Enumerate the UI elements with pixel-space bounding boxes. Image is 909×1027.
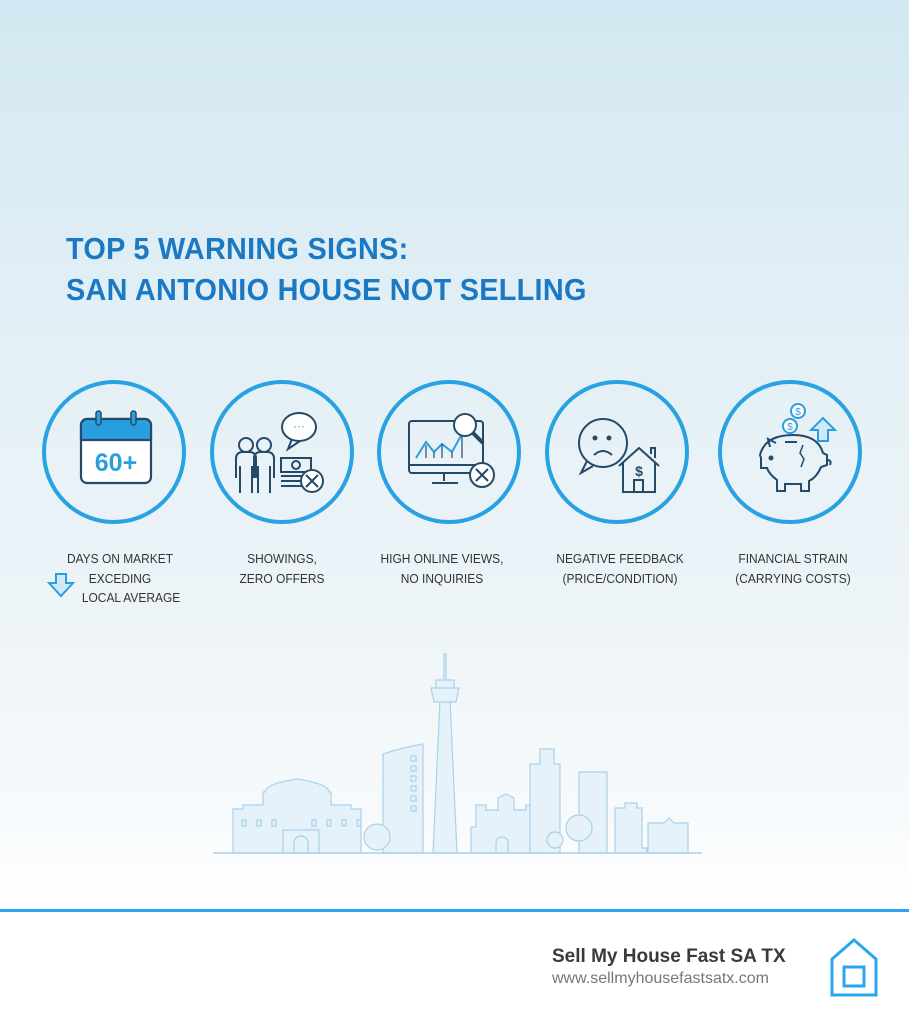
icon: calendar 60+ xyxy=(44,382,184,522)
title xyxy=(66,231,587,307)
label 2 xyxy=(239,551,325,586)
icon: sad bubble and house: $ xyxy=(635,463,643,479)
label 4: (PRICE/CONDITION) xyxy=(563,570,677,586)
footer brand text xyxy=(552,946,786,987)
icon: down arrow xyxy=(49,574,73,596)
label 1 xyxy=(67,551,180,605)
skyline xyxy=(213,653,702,854)
footer brand text: Sell My House Fast SA TX xyxy=(552,946,786,967)
footer xyxy=(0,909,909,1027)
icons row xyxy=(42,380,862,598)
icon: piggy bank with coins xyxy=(720,382,860,522)
label 1: DAYS ON MARKET xyxy=(67,551,173,566)
label 2: ZERO OFFERS xyxy=(239,570,325,586)
title: SAN ANTONIO HOUSE NOT SELLING xyxy=(66,272,587,307)
icon: house logo xyxy=(830,938,878,996)
label 3 xyxy=(381,551,503,586)
icon: monitor with chart and magnifier xyxy=(379,382,519,522)
label 5: FINANCIAL STRAIN xyxy=(738,551,848,566)
label 3: NO INQUIRIES xyxy=(401,570,483,586)
label 4 xyxy=(556,551,684,586)
label 5 xyxy=(735,551,851,586)
label 4: NEGATIVE FEEDBACK xyxy=(556,551,684,566)
label 1: LOCAL AVERAGE xyxy=(82,590,180,605)
footer brand text: www.sellmyhousefastsatx.com xyxy=(552,970,769,987)
label 3: HIGH ONLINE VIEWS, xyxy=(381,551,503,566)
icon: sad bubble and house xyxy=(547,382,687,522)
icon: piggy bank with coins: $ xyxy=(787,422,793,433)
label 5: (CARRYING COSTS) xyxy=(735,570,851,586)
title: TOP 5 WARNING SIGNS: xyxy=(66,231,409,266)
label 2: SHOWINGS, xyxy=(247,551,317,566)
icon: people with speech bubble and cash xyxy=(212,382,352,522)
label 1: EXCEDING xyxy=(89,570,151,586)
icon: people with speech bubble and cash: ··· xyxy=(293,419,305,433)
icon: piggy bank with coins: $ xyxy=(795,407,801,418)
icon: calendar 60+: 60+ xyxy=(95,449,137,477)
